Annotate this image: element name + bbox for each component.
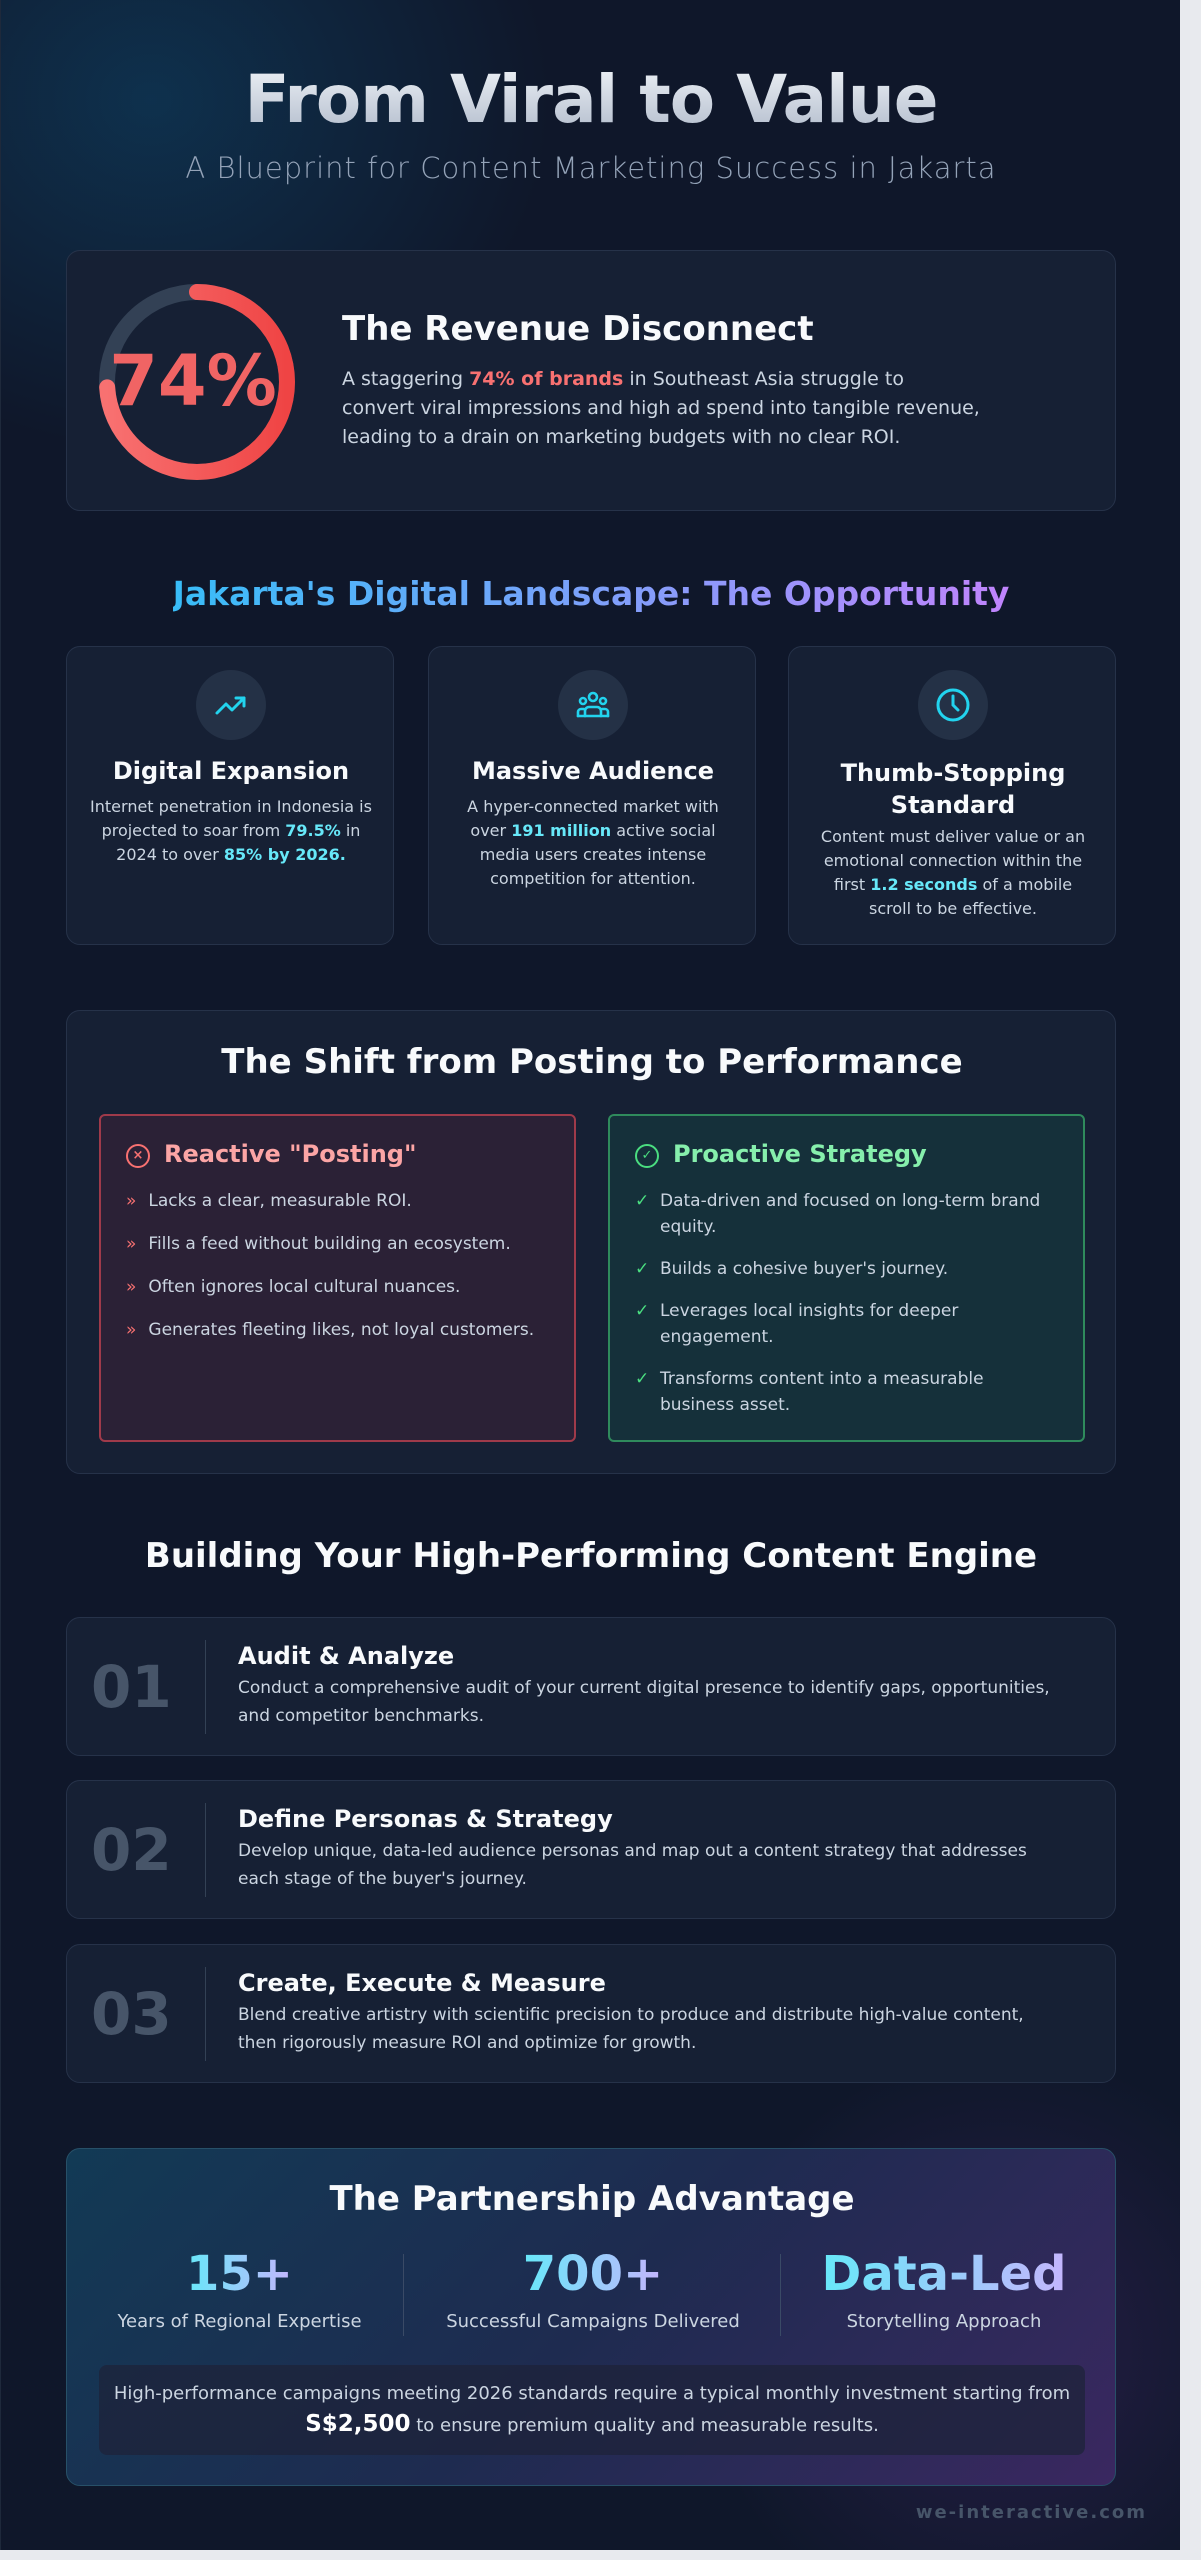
step text: Audit & Analyze — [238, 1642, 454, 1670]
icon: trending up — [196, 670, 266, 740]
step text: Define Personas & Strategy — [238, 1805, 613, 1833]
body text: A staggering 74% of brands in Southeast Asia struggle to — [342, 368, 904, 390]
number: 01 — [91, 1653, 172, 1721]
body text — [342, 368, 980, 448]
heading: The Shift from Posting to Performance — [221, 1042, 963, 1082]
stat: 15+: 15+ — [186, 2246, 293, 2302]
title — [1, 60, 1181, 140]
step 02 — [66, 1780, 1116, 1919]
donut chart 74% — [99, 284, 295, 480]
box title: ✓ — [642, 1148, 652, 1163]
text: Internet penetration in Indonesia is projected to soar from 79.5% in 2024 to over 85% by 2026. — [90, 797, 372, 864]
box: proactive strategy — [608, 1114, 1085, 1442]
list: » Generates fleeting likes, not loyal customers. — [126, 1320, 534, 1340]
step text — [238, 1969, 1024, 2053]
text: A hyper-connected market with over 191 million active social media users creates intense competition for attention. — [467, 797, 719, 888]
heading: The Revenue Disconnect — [342, 309, 814, 349]
step text: Develop unique, data-led audience personas and map out a content strategy that addresses each stage of the buyer's journey. — [238, 1841, 1027, 1889]
list: Leverages local insights for deeper engagement. — [660, 1301, 958, 1347]
panel: shift from posting to performance — [66, 1010, 1116, 1474]
subtitle: A Blueprint for Content Marketing Success in Jakarta — [185, 151, 997, 185]
stat: 700+: 700+ — [523, 2246, 663, 2302]
step text: Create, Execute & Measure — [238, 1969, 606, 1997]
box title: Proactive Strategy — [673, 1140, 927, 1168]
stat: 700+ — [446, 2246, 740, 2332]
icon: people — [558, 670, 628, 740]
heading: digital landscape: Jakarta's Digital Landscape: The Opportunity — [173, 574, 1009, 613]
title: Massive Audience — [472, 757, 714, 785]
card: massive audience — [428, 646, 756, 945]
investment callout — [99, 2365, 1085, 2455]
title — [840, 759, 1065, 819]
icon: clock — [918, 670, 988, 740]
stat: 700+: Successful Campaigns Delivered — [446, 2311, 740, 2332]
step text: Blend creative artistry with scientific precision to produce and distribute high-value content, — [238, 2005, 1024, 2025]
stat: data-led: Data-Led — [822, 2246, 1066, 2302]
list: ✓ — [635, 1369, 649, 1389]
number: 03 — [91, 1980, 172, 2048]
stat: 15+: Years of Regional Expertise — [117, 2311, 362, 2332]
stat: data-led: Storytelling Approach — [847, 2311, 1041, 2332]
list — [126, 1191, 534, 1340]
number: 02 — [91, 1816, 172, 1884]
step text: Conduct a comprehensive audit of your current digital presence to identify gaps, opportunities, and competitor benchmarks. — [238, 1678, 1050, 1726]
list: ✓ — [635, 1191, 649, 1211]
list: ✓ — [635, 1259, 649, 1279]
title: Standard — [891, 791, 1015, 819]
investment callout: High-performance campaigns meeting 2026 standards require a typical monthly investment starting from — [114, 2383, 1070, 2404]
list: ✓ — [635, 1301, 649, 1321]
step 01 — [66, 1617, 1116, 1756]
donut chart 74%: 74% — [109, 340, 277, 422]
list: » Often ignores local cultural nuances. — [126, 1277, 460, 1297]
list: Builds a cohesive buyer's journey. — [660, 1259, 948, 1279]
list: Transforms content into a measurable — [660, 1369, 984, 1389]
title: From Viral to Value — [244, 61, 937, 138]
step 03 — [66, 1944, 1116, 2083]
title: Digital Expansion — [113, 757, 349, 785]
panel: revenue disconnect — [66, 250, 1116, 511]
stat: data-led — [822, 2246, 1066, 2332]
list: Data-driven and focused on long-term brand equity. — [660, 1191, 1040, 1237]
card: digital expansion — [66, 646, 394, 945]
stat: 15+ — [117, 2246, 362, 2332]
step text — [238, 1642, 1050, 1726]
panel: partnership advantage — [66, 2148, 1116, 2486]
heading: content engine: Building Your High-Performing Content Engine — [145, 1536, 1037, 1576]
text: Content must deliver value or an emotional connection within the first 1.2 seconds of a mobile scroll to be effective. — [821, 827, 1085, 918]
step text — [238, 1805, 1027, 1889]
list: » Fills a feed without building an ecosystem. — [126, 1234, 511, 1254]
list: » Lacks a clear, measurable ROI. — [126, 1191, 412, 1211]
body text: convert viral impressions and high ad spend into tangible revenue, leading to a drain on marketing budgets with no clear ROI. — [342, 397, 980, 448]
box title: × — [133, 1148, 143, 1163]
footer: website: we-interactive.com — [916, 2502, 1147, 2523]
heading: The Partnership Advantage — [329, 2179, 855, 2219]
step text: then rigorously measure ROI and optimize for growth. — [238, 2033, 696, 2053]
card: thumb-stopping standard — [788, 646, 1116, 945]
box: reactive posting — [99, 1114, 576, 1442]
title: Thumb-Stopping — [841, 759, 1065, 787]
list: business asset. — [660, 1395, 790, 1415]
investment callout: S$2,500 to ensure premium quality and measurable results. — [305, 2411, 879, 2437]
list — [635, 1191, 1040, 1415]
box title: Reactive "Posting" — [164, 1140, 416, 1168]
